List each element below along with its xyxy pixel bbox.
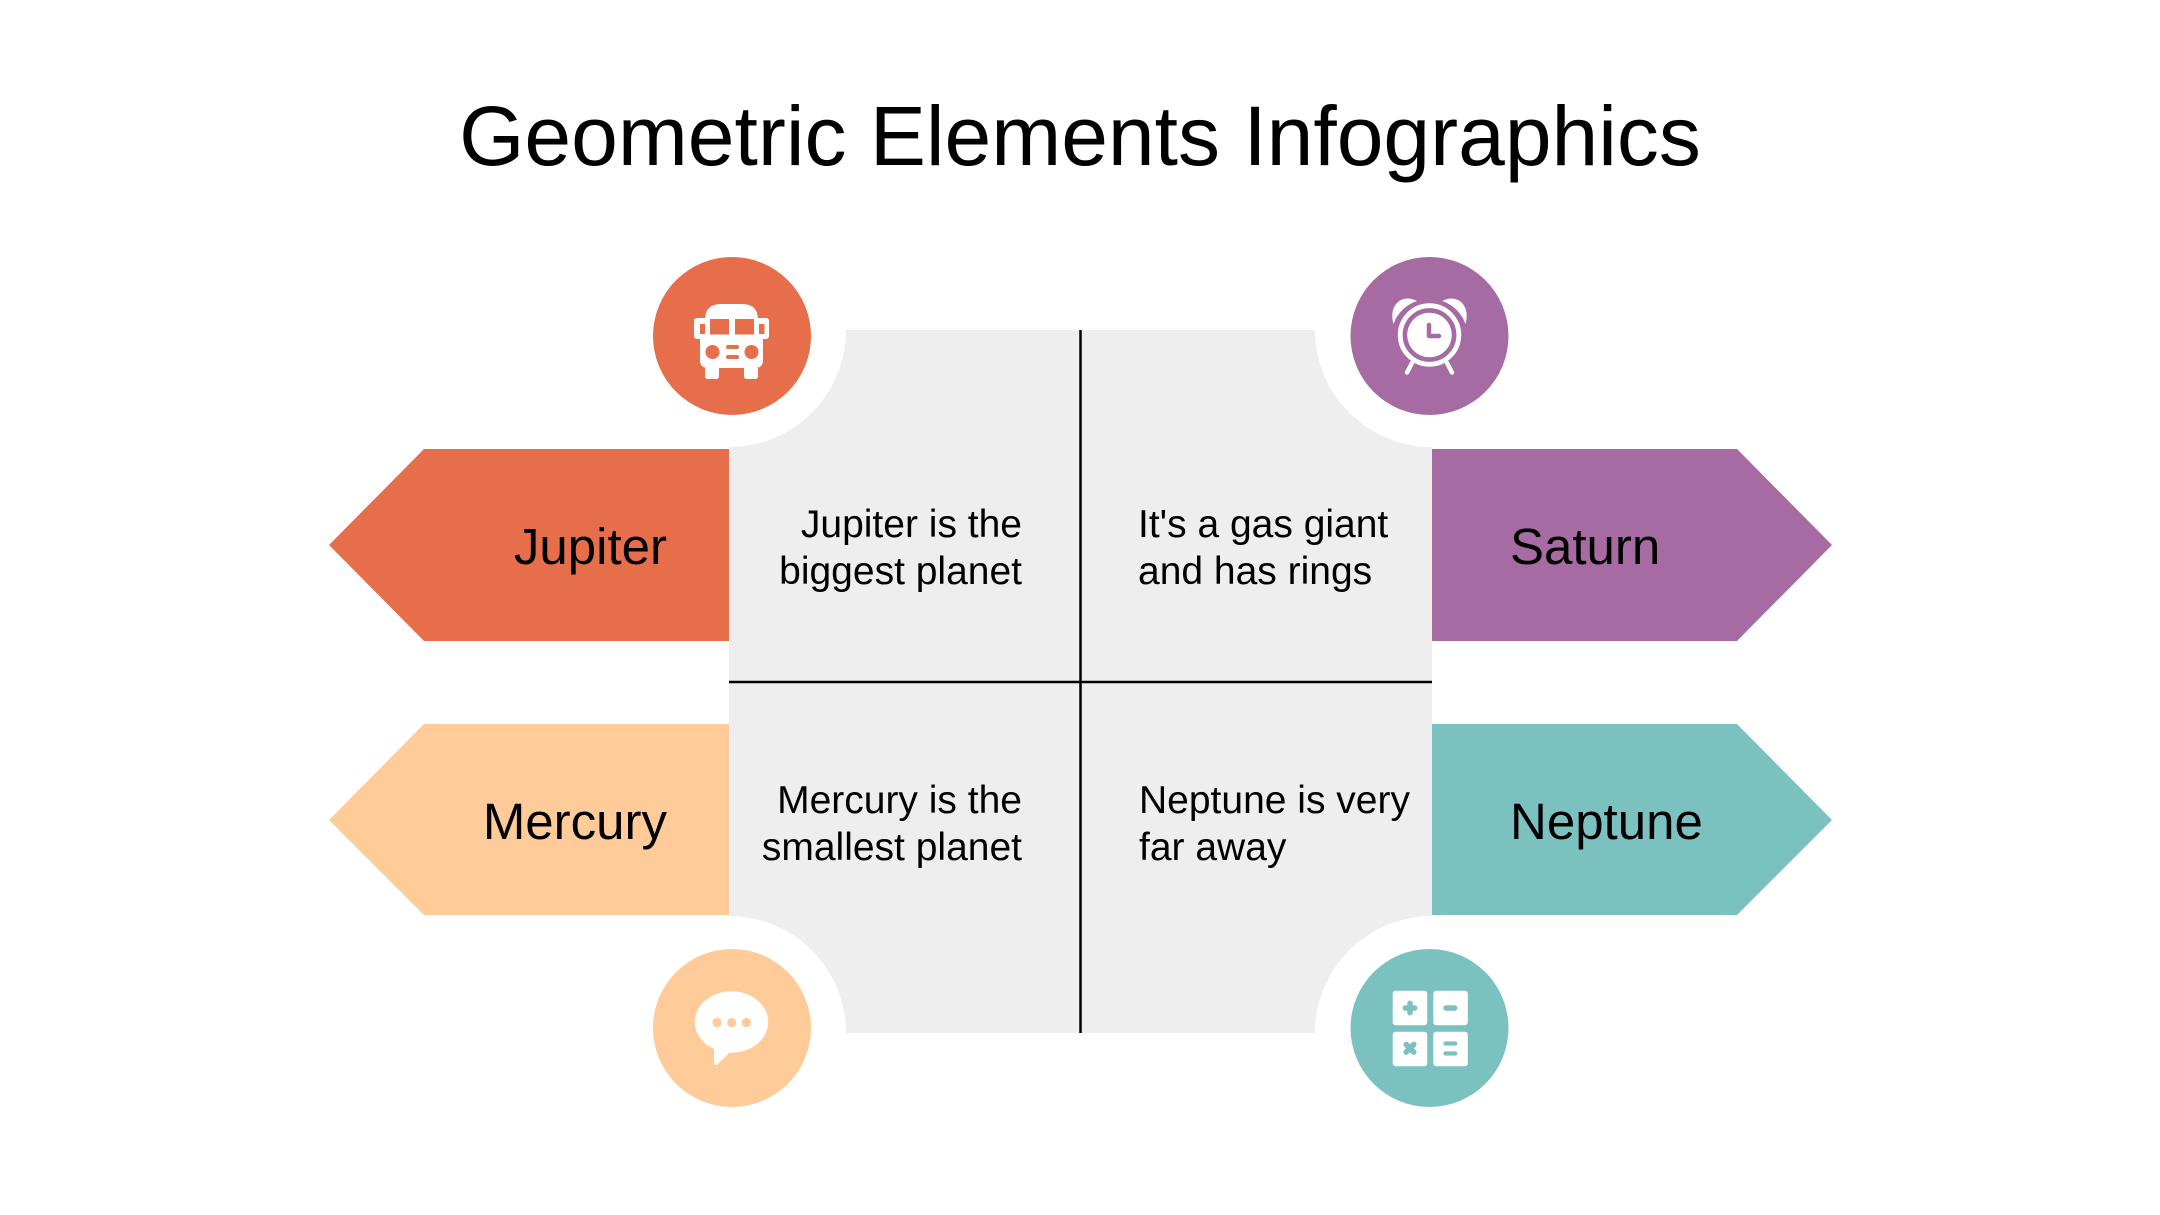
horizontal divider	[729, 681, 1432, 683]
icon: speech bubble in peach circle	[653, 949, 811, 1107]
title: Geometric Elements Infographics	[459, 89, 1701, 183]
icon: alarm clock in purple circle	[1350, 257, 1508, 415]
arrow: Saturn: Saturn	[1510, 518, 1660, 575]
text: Jupiter description: Jupiter is the	[801, 503, 1022, 546]
icon: calculator keys in teal circle	[1350, 949, 1508, 1107]
arrow: Neptune	[1432, 724, 1832, 915]
text: Jupiter description: biggest planet	[779, 550, 1022, 593]
text: Mercury description: Mercury is the	[777, 779, 1022, 822]
text: Saturn description: It's a gas giant	[1138, 503, 1388, 546]
text: Saturn description: and has rings	[1138, 550, 1372, 593]
central grey panel with concave corners	[729, 330, 1432, 1033]
icon: bus in orange circle	[653, 257, 811, 415]
arrow: Neptune: Neptune	[1510, 793, 1703, 850]
arrow: Mercury	[329, 724, 729, 915]
text: Neptune description: far away	[1139, 826, 1287, 869]
arrow: Mercury: Mercury	[483, 793, 667, 850]
arrow: Jupiter	[329, 449, 729, 641]
vertical divider	[1079, 330, 1082, 1033]
text: Mercury description: smallest planet	[762, 826, 1022, 869]
text: Neptune description: Neptune is very	[1139, 779, 1410, 822]
arrow: Jupiter: Jupiter	[514, 518, 667, 575]
arrow: Saturn	[1432, 449, 1832, 641]
